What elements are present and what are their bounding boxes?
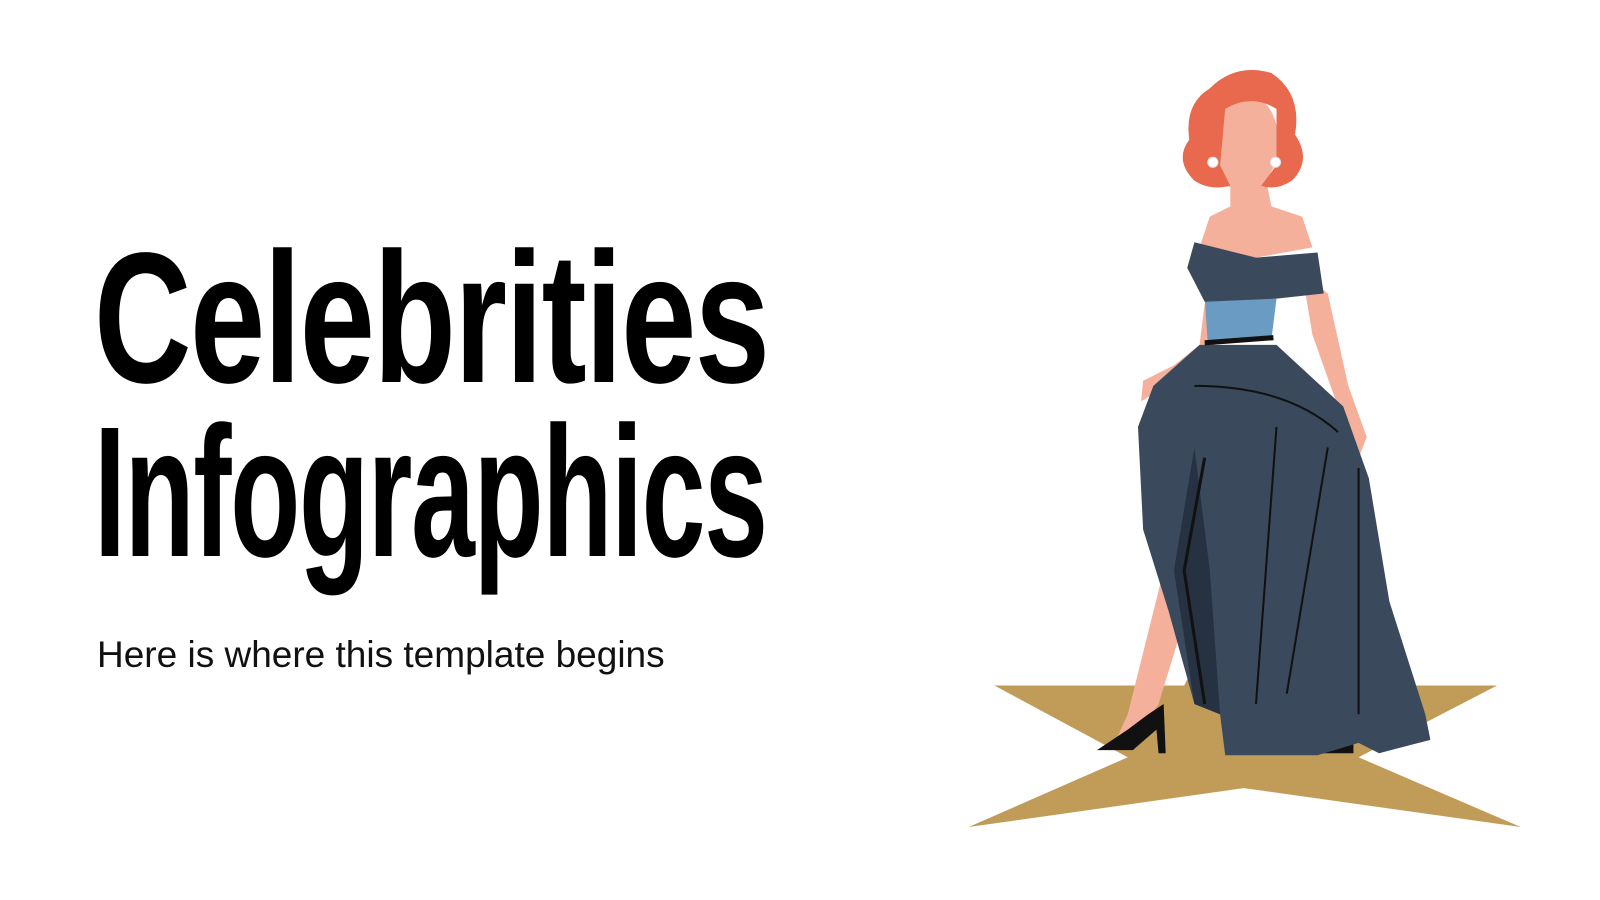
- title: [94, 215, 769, 596]
- shoes: [1097, 704, 1166, 753]
- bodice: [1187, 242, 1324, 302]
- hair: [1183, 70, 1303, 188]
- back leg: [1318, 612, 1340, 743]
- title: Infographics: [94, 389, 767, 596]
- arms: [1302, 273, 1367, 458]
- subtitle: Here is where this template begins: [97, 634, 665, 675]
- title: Celebrities: [94, 215, 769, 422]
- skirt: [1138, 345, 1430, 755]
- belt: [1205, 299, 1276, 343]
- figure: [1097, 70, 1430, 755]
- face: [1209, 92, 1279, 191]
- earrings: [1208, 157, 1218, 167]
- front leg: [1117, 447, 1200, 743]
- neck and shoulders: [1200, 181, 1312, 258]
- star: [969, 571, 1521, 827]
